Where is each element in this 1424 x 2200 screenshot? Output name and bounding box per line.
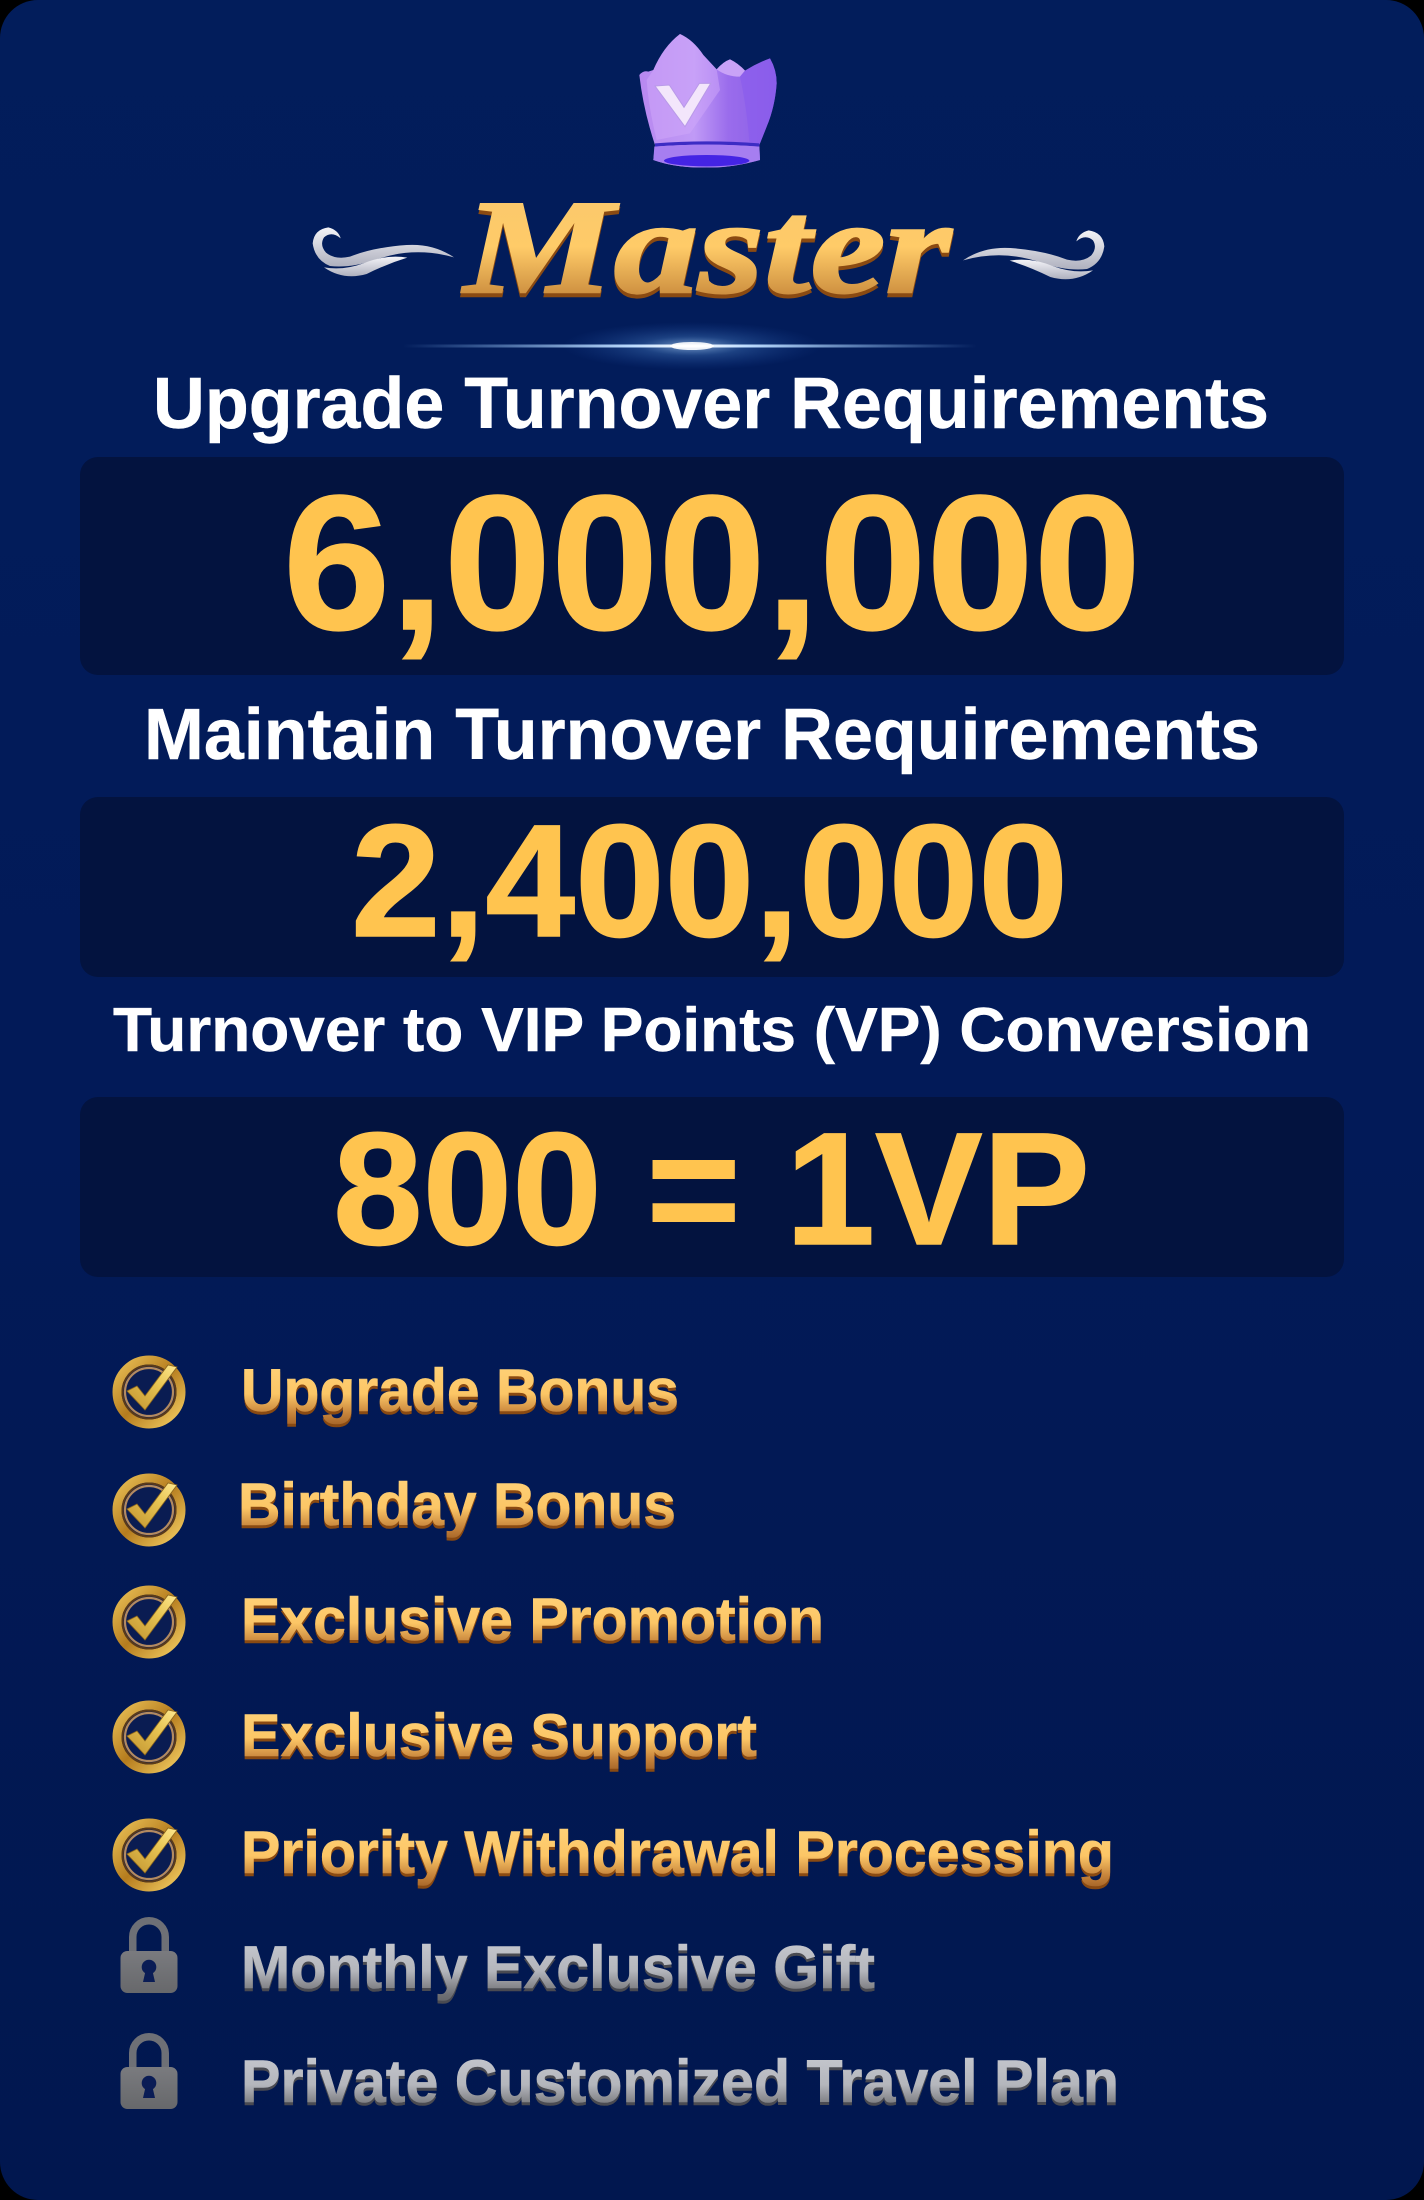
value: 2,400,000: 2,400,000 bbox=[351, 791, 1068, 970]
list item: private customized travel plan: Private Customized Travel Plan bbox=[241, 2051, 1119, 2118]
value: 800 = 1VP: 800 = 1VP bbox=[333, 1099, 1090, 1278]
icon: purple crown with V emblem bbox=[639, 34, 777, 167]
panel: maintain value bbox=[80, 791, 1344, 977]
list item: exclusive promotion: Exclusive Promotion bbox=[241, 1589, 824, 1656]
icon: gold check bbox=[117, 1705, 181, 1769]
list item: upgrade bonus: Upgrade Bonus bbox=[241, 1357, 679, 1424]
panel: conversion value bbox=[80, 1097, 1344, 1278]
title: Master: Master bbox=[461, 177, 953, 325]
panel: upgrade value bbox=[80, 455, 1344, 675]
icon: gold check bbox=[117, 1590, 181, 1654]
light beam divider bbox=[403, 322, 977, 370]
value: 6,000,000: 6,000,000 bbox=[283, 455, 1141, 670]
list item: monthly exclusive gift: Monthly Exclusive Gift bbox=[241, 1934, 875, 2001]
list item: birthday bonus: Birthday Bonus bbox=[238, 1471, 676, 1538]
list item: exclusive promotion: Exclusive Promotion bbox=[241, 1586, 824, 1653]
heading: VP conversion: Turnover to VIP Points (VP) Conversion bbox=[113, 996, 1311, 1065]
icon: left silver flourish bbox=[313, 227, 454, 276]
heading: maintain turnover requirements: Maintain Turnover Requirements bbox=[144, 695, 1260, 775]
list item: priority withdrawal processing: Priority Withdrawal Processing bbox=[241, 1822, 1114, 1889]
icon: right silver flourish bbox=[963, 230, 1104, 279]
icon: gold check bbox=[117, 1823, 181, 1887]
icon: gold check bbox=[117, 1478, 181, 1542]
list item: upgrade bonus: Upgrade Bonus bbox=[241, 1360, 679, 1427]
title: Master: Master bbox=[461, 173, 953, 321]
list item: exclusive support: Exclusive Support bbox=[241, 1705, 757, 1772]
list item: birthday bonus: Birthday Bonus bbox=[238, 1474, 676, 1541]
list item: priority withdrawal processing: Priority Withdrawal Processing bbox=[241, 1819, 1114, 1886]
icon: gold check bbox=[117, 1360, 181, 1424]
icon: grey lock bbox=[120, 1921, 178, 1993]
heading: upgrade turnover requirements: Upgrade Turnover Requirements bbox=[153, 364, 1269, 444]
list item: monthly exclusive gift bbox=[120, 1921, 875, 2004]
list item: private customized travel plan: Private Customized Travel Plan bbox=[241, 2048, 1119, 2115]
icon: grey lock bbox=[120, 2037, 178, 2109]
list item: exclusive support: Exclusive Support bbox=[241, 1702, 757, 1769]
list item: monthly exclusive gift: Monthly Exclusive Gift bbox=[241, 1937, 875, 2004]
